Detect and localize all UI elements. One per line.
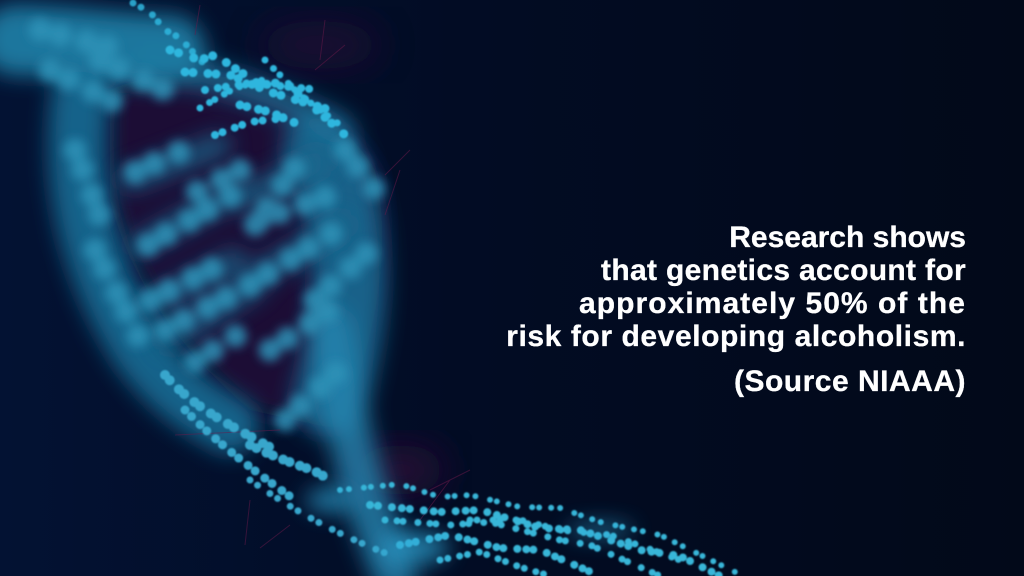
text block: research statement: risk for developing alcoholism.	[506, 320, 966, 353]
lower strand of bright dots	[165, 375, 735, 576]
helix blurred rungs	[40, 30, 375, 420]
text block: research statement: that genetics account for	[601, 254, 966, 287]
text block: research statement: Research shows	[729, 221, 966, 254]
helix soft strands	[15, 40, 395, 575]
crimson glow lower	[355, 445, 445, 495]
text block: source: (Source NIAAA)	[734, 365, 966, 398]
text block: research statement	[506, 221, 966, 353]
dark crimson helix core	[110, 74, 382, 430]
crimson filaments	[175, 5, 470, 548]
upper strand of bright dots	[133, 3, 345, 135]
helix rung underlay	[130, 145, 340, 340]
crimson glow upper	[260, 21, 380, 69]
lower bright glow	[306, 488, 634, 564]
text block: research statement: approximately 50% of the	[579, 287, 966, 320]
